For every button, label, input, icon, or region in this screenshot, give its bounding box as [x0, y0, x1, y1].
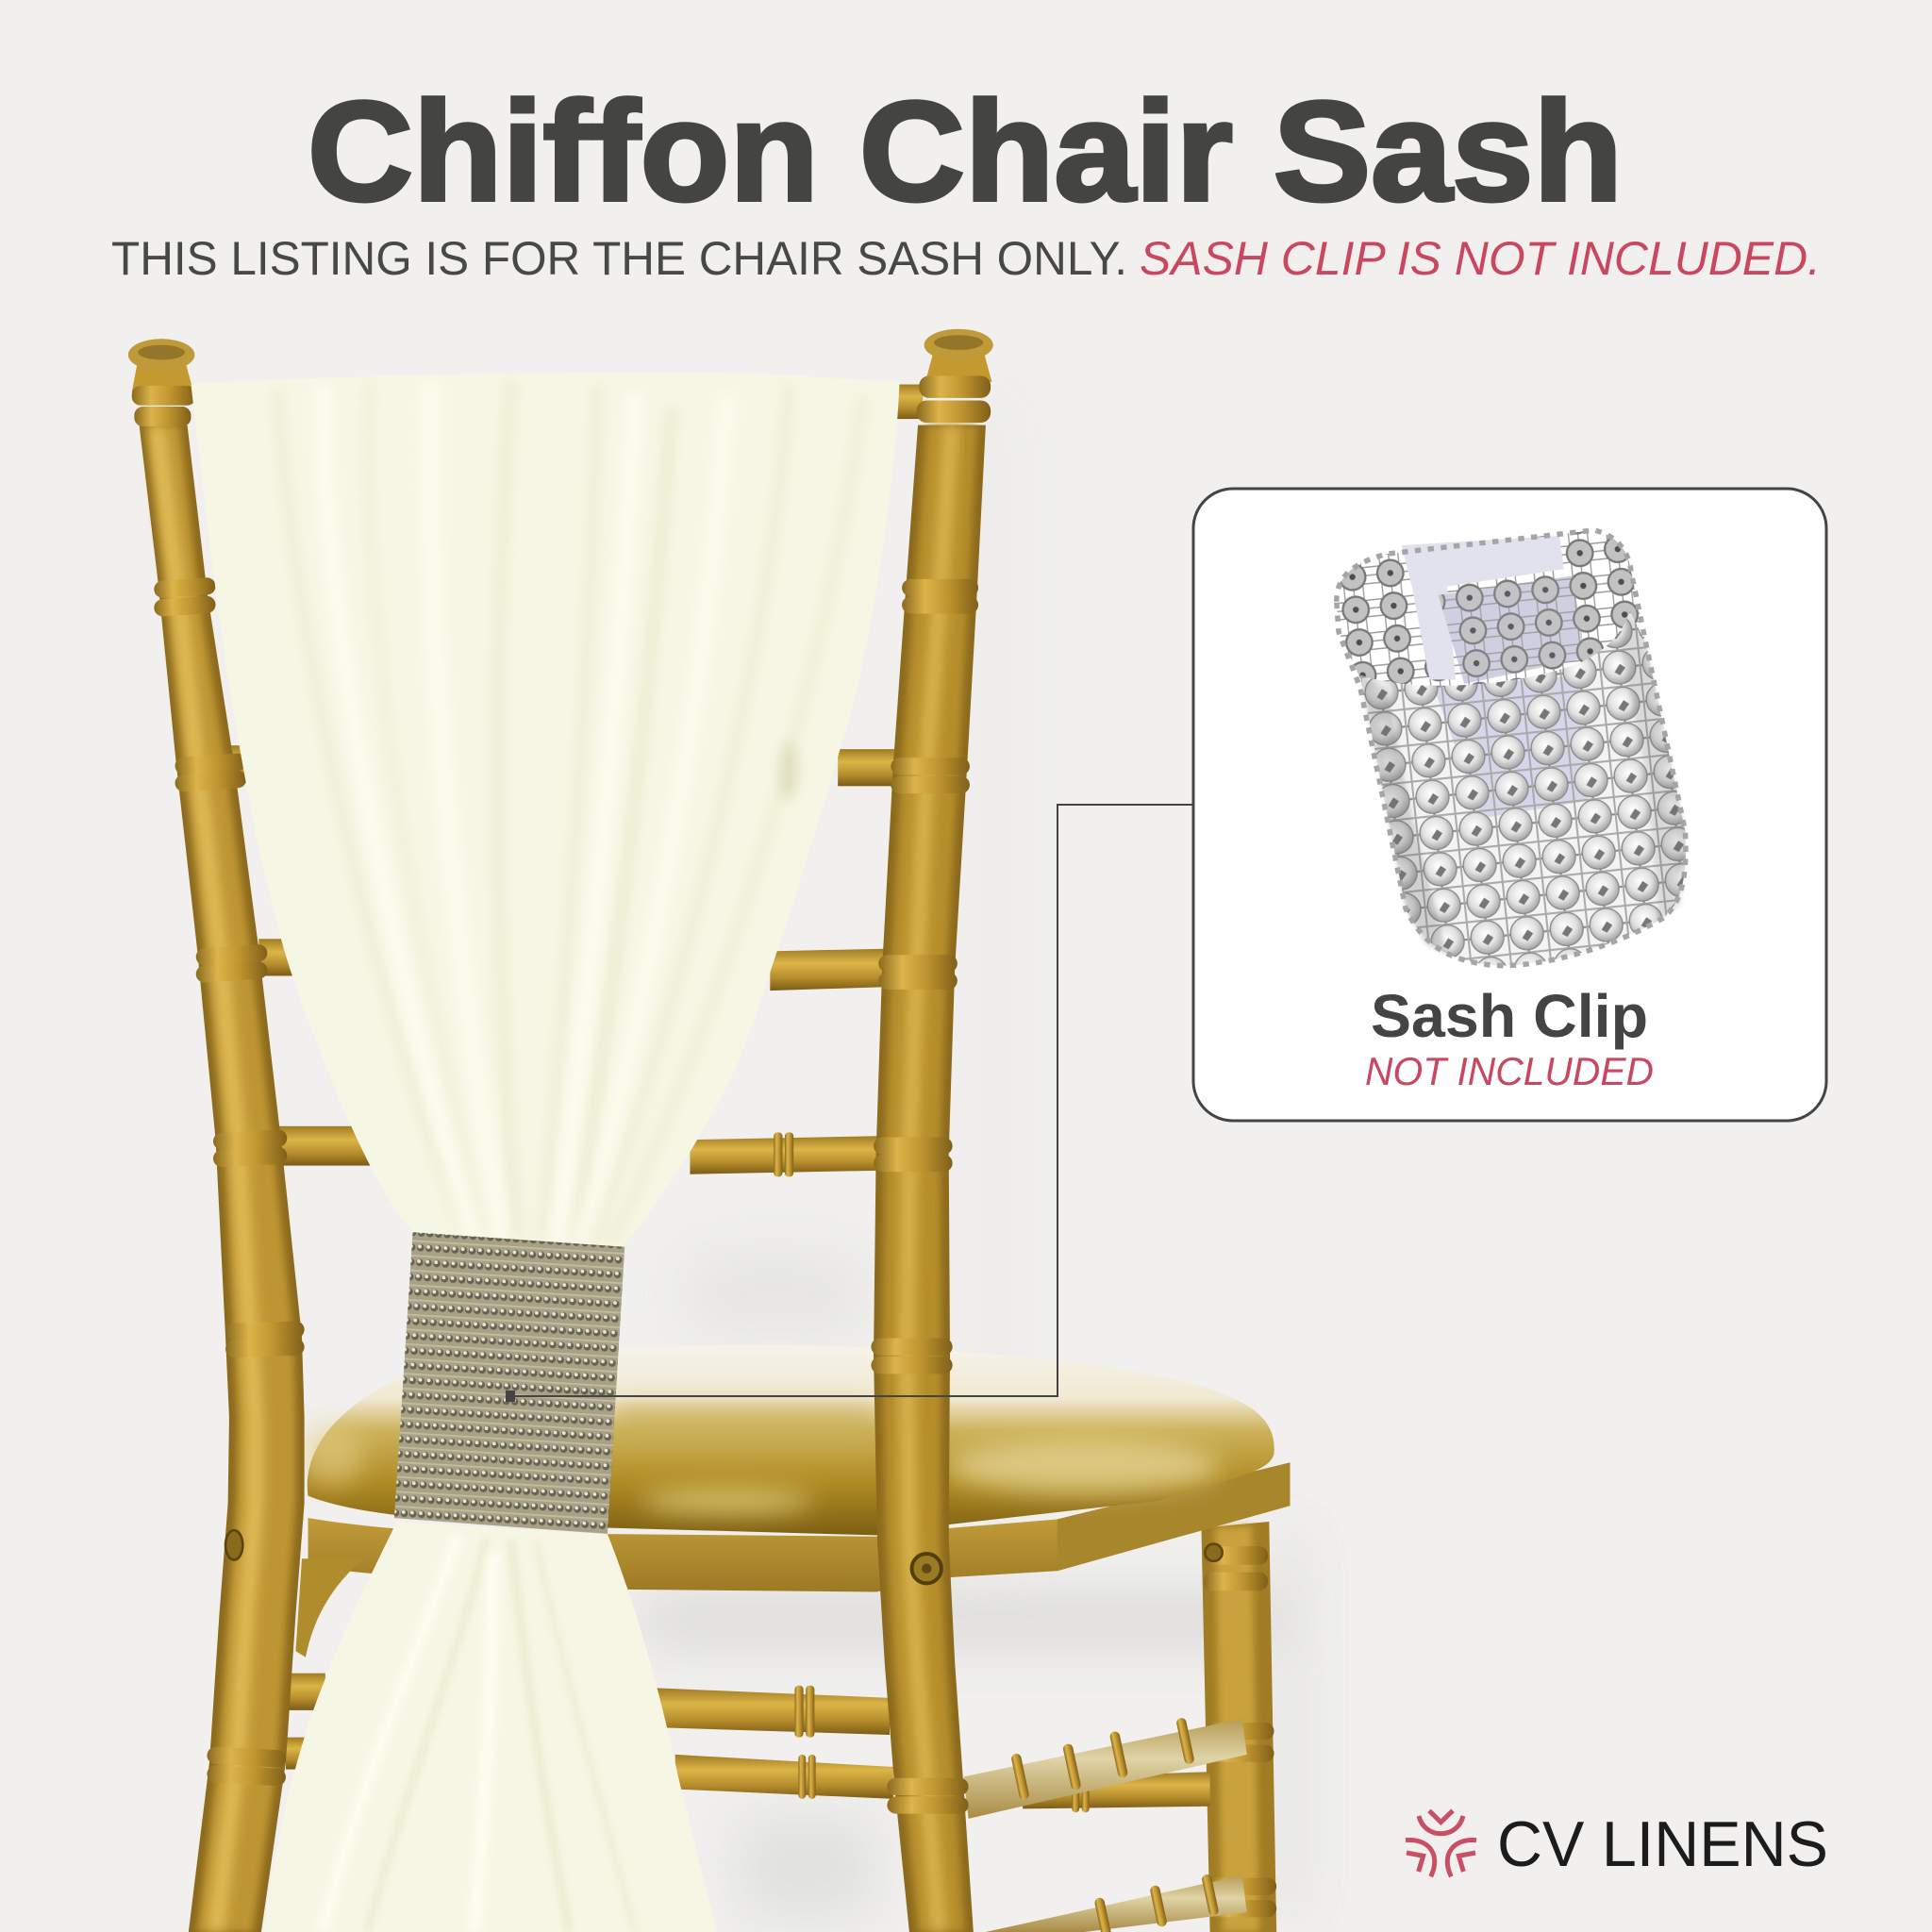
- right chair post: [871, 329, 993, 1932]
- chair rungs and stretchers: [228, 385, 1247, 1932]
- logo wordmark: CV LINENS: [1497, 1808, 1828, 1880]
- icon: CV Linens mark: [1406, 1810, 1476, 1876]
- soft shadows behind chair: [641, 394, 1299, 1923]
- lower chiffon sash: [264, 1522, 717, 1932]
- sash clip on chair: [394, 1232, 625, 1534]
- sash clip product image: [1337, 530, 1686, 966]
- left chair post: [128, 339, 305, 1932]
- gold seat cushion: [302, 1345, 1274, 1535]
- subtitle warning text: SASH CLIP IS NOT INCLUDED.: [1140, 232, 1821, 285]
- subtitle: [111, 232, 1821, 285]
- upper chiffon sash: [191, 373, 899, 1247]
- callout connector line: [506, 805, 1192, 1402]
- cushion highlights: [302, 1405, 1220, 1513]
- subtitle main text: THIS LISTING IS FOR THE CHAIR SASH ONLY.: [111, 232, 1127, 285]
- panel: sash clip callout: [1193, 489, 1826, 1121]
- back right leg: [1201, 1522, 1276, 1932]
- sash folds: [277, 379, 862, 1244]
- sash clip label: Sash Clip: [1371, 982, 1648, 1050]
- logo: CV Linens: [1406, 1808, 1828, 1880]
- chair photo with chiffon sash: [128, 329, 1299, 1932]
- not included label: NOT INCLUDED: [1365, 1049, 1654, 1093]
- title: Chiffon Chair Sash: [308, 72, 1623, 230]
- seat frame: [295, 1462, 1291, 1657]
